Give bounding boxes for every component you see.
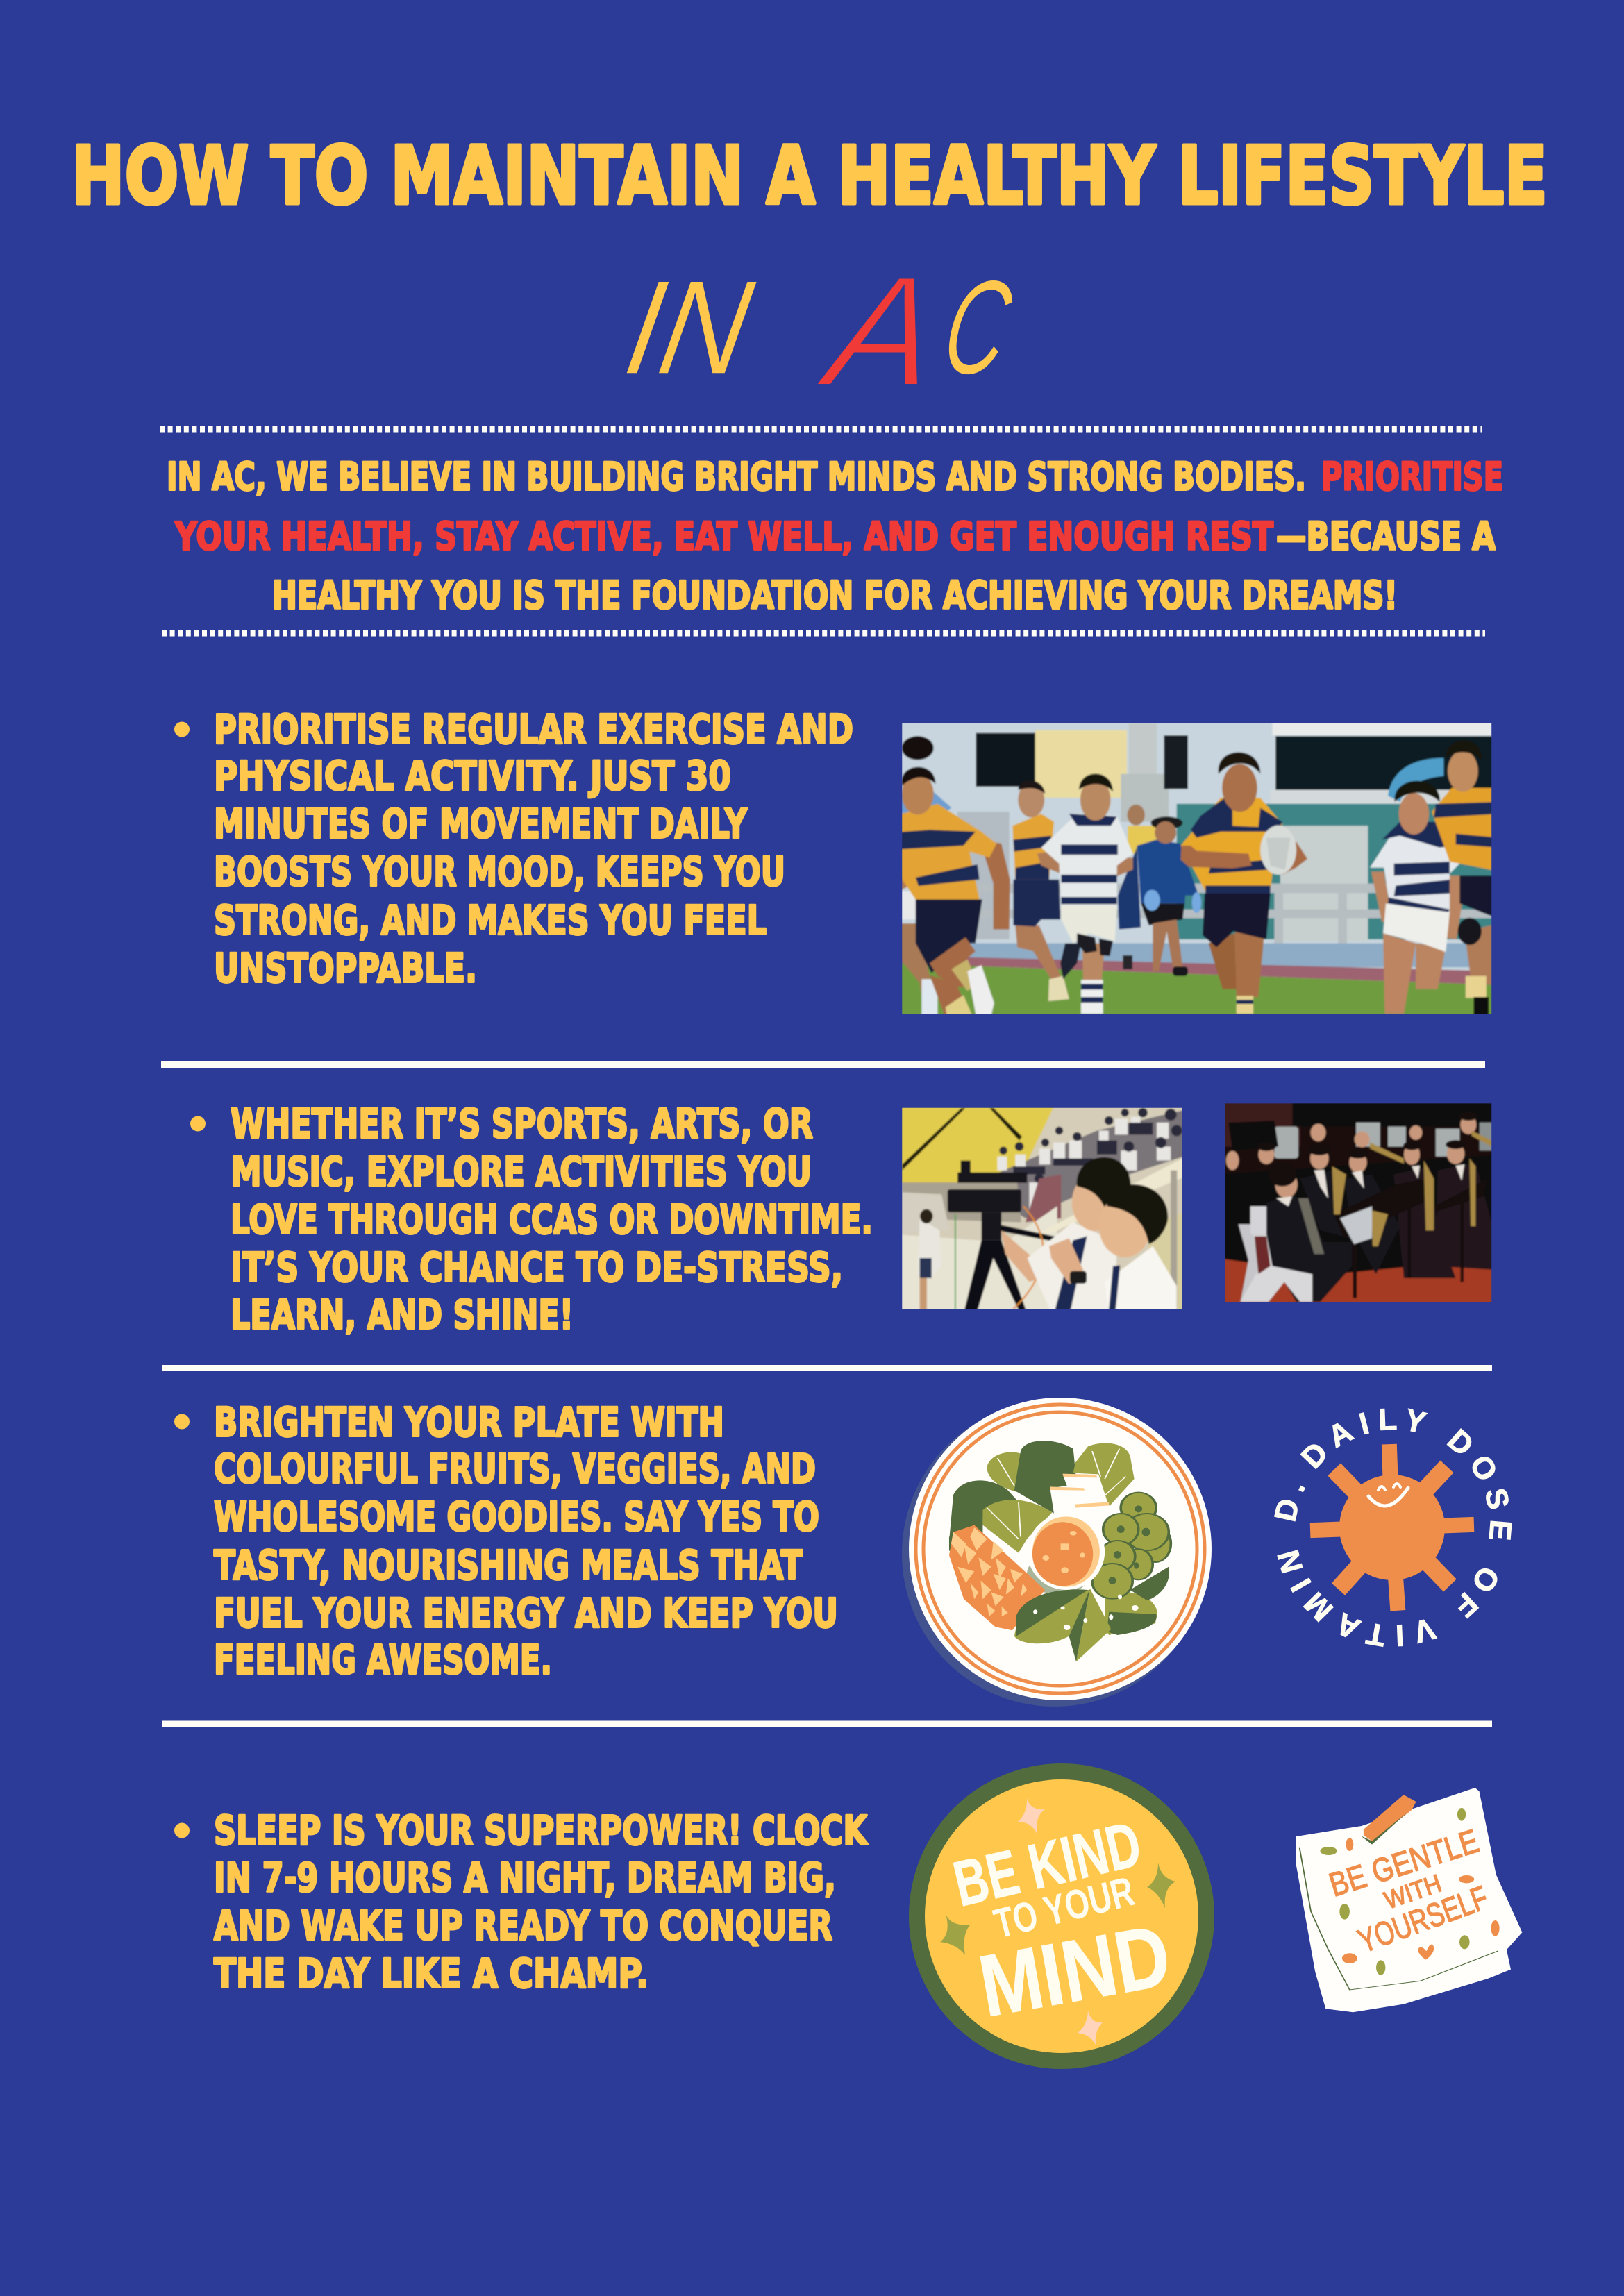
section 3 text: healthy eating: FUEL YOUR ENERGY AND KEEP YOU	[214, 1590, 838, 1637]
section 4 text: sleep	[174, 1807, 869, 1997]
intro paragraph: IN AC, WE BELIEVE IN BUILDING BRIGHT MINDS AND STRONG BODIES.	[167, 454, 1306, 498]
illustration: sticky note	[1296, 1788, 1522, 2012]
illustration: sun badge, daily dose of vitamin D: DAILY DOSE OF VITAMIN D.	[1274, 1408, 1512, 1647]
intro paragraph	[167, 454, 1503, 618]
section 3 text: healthy eating	[174, 1398, 838, 1683]
section 2 text: activities: WHETHER IT’S SPORTS, ARTS, OR	[231, 1100, 813, 1147]
section 1 text: exercise: PHYSICAL ACTIVITY. JUST 30	[214, 753, 731, 800]
player white right	[1370, 781, 1466, 1014]
subtitle: IN AC: A	[809, 244, 952, 419]
section 4 text: sleep: AND WAKE UP READY TO CONQUER	[214, 1902, 832, 1950]
player right edge	[1430, 740, 1491, 1014]
subtitle: IN AC: C	[934, 253, 1022, 403]
badge: be kind to your mind: MIND	[972, 1906, 1178, 2036]
illustration: sticky note: WITH	[1380, 1868, 1445, 1915]
section 1 text: exercise: PRIORITISE REGULAR EXERCISE AND	[214, 705, 853, 753]
player main with ball	[1180, 752, 1307, 1014]
section 4 text: sleep: SLEEP IS YOUR SUPERPOWER! CLOCK	[214, 1807, 869, 1854]
photo: school band	[1225, 1103, 1491, 1302]
photo: rugby match	[894, 715, 1500, 1023]
section 1 text: exercise	[174, 705, 853, 991]
section 3 text: healthy eating: COLOURFUL FRUITS, VEGGIES, AND	[214, 1446, 816, 1493]
section 4 text: sleep: IN 7-9 HOURS A NIGHT, DREAM BIG,	[214, 1854, 836, 1901]
player yellow small	[1012, 780, 1069, 1001]
player white stripes	[1037, 773, 1133, 1014]
section 1 text: exercise: BOOSTS YOUR MOOD, KEEPS YOU	[214, 848, 785, 896]
illustration: sticky note: YOURSELF	[1354, 1879, 1493, 1960]
section 1 text: exercise: UNSTOPPABLE.	[214, 944, 477, 991]
section 2 text: activities: LEARN, AND SHINE!	[231, 1291, 574, 1339]
camera on tripod	[948, 1160, 1063, 1317]
badge: be kind to your mind: BE KIND	[948, 1809, 1148, 1920]
badge: be kind to your mind: TO YOUR	[989, 1868, 1139, 1947]
section 3 text: healthy eating: WHOLESOME GOODIES. SAY YES TO	[214, 1493, 819, 1540]
section 3 text: healthy eating: FEELING AWESOME.	[214, 1636, 552, 1683]
section 2 text: activities: IT’S YOUR CHANCE TO DE-STRESS,	[231, 1244, 843, 1291]
section 2 text: activities: LOVE THROUGH CCAS OR DOWNTIME.	[231, 1196, 873, 1243]
infographic canvas	[76, 142, 1544, 2069]
section 1 text: exercise: STRONG, AND MAKES YOU FEEL	[214, 897, 767, 944]
badge: be kind to your mind	[909, 1763, 1214, 2069]
photo: students filming	[902, 1108, 1182, 1309]
section 3 text: healthy eating: TASTY, NOURISHING MEALS THAT	[214, 1541, 803, 1589]
illustration: plate of food	[902, 1398, 1212, 1707]
audience	[997, 1108, 1182, 1210]
subtitle: IN AC	[617, 244, 1022, 419]
section 2 text: activities: MUSIC, EXPLORE ACTIVITIES YOU	[231, 1148, 812, 1196]
section 1 text: exercise: MINUTES OF MOVEMENT DAILY	[214, 800, 748, 847]
intro paragraph: YOUR HEALTH, STAY ACTIVE, EAT WELL, AND GET ENOUGH REST	[174, 514, 1273, 558]
player group background	[1118, 805, 1201, 976]
subtitle: IN AC: IN	[617, 253, 762, 403]
band players	[1226, 1115, 1476, 1198]
section 2 text: activities	[190, 1100, 873, 1339]
students	[1001, 1157, 1177, 1317]
player left foreground	[894, 736, 1010, 1023]
section 4 text: sleep: THE DAY LIKE A CHAMP.	[214, 1950, 648, 1997]
illustration: sticky note: BE GENTLE	[1325, 1823, 1483, 1904]
intro paragraph: —BECAUSE A	[1276, 514, 1496, 558]
intro paragraph: PRIORITISE	[1321, 454, 1503, 498]
section 3 text: healthy eating: BRIGHTEN YOUR PLATE WITH	[214, 1398, 724, 1446]
